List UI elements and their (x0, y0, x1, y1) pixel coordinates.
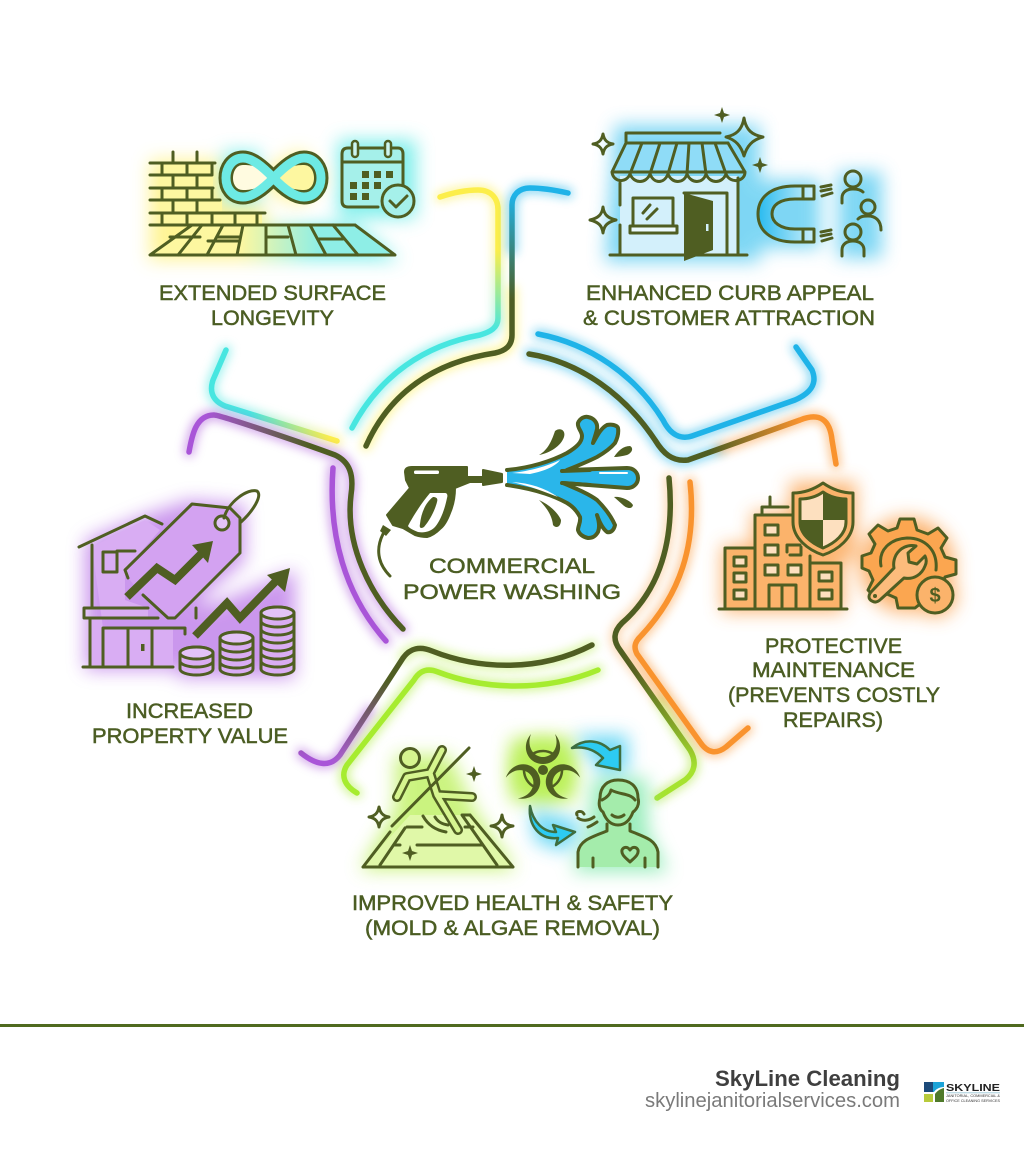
arrow bottom (530, 806, 575, 845)
sparkles (726, 118, 763, 156)
heading: protective maintenance: REPAIRS) (783, 709, 883, 732)
person (400, 748, 420, 768)
heading: protective maintenance: MAINTENANCE (752, 659, 915, 682)
heading: increased property value (92, 700, 288, 748)
connector: purple inner arc (332, 468, 386, 641)
slash (392, 748, 469, 826)
icon: building, shield, gear, dollar (719, 482, 957, 617)
icon: biohazard, arrows, healthy person (503, 734, 668, 872)
footer divider (0, 1024, 1024, 1027)
connector ring (189, 188, 836, 798)
sparkles (402, 766, 482, 861)
arrow top (572, 741, 620, 770)
connector: dark to purple (301, 645, 592, 763)
panel: protective maintenance (719, 482, 957, 732)
icon: storefront, sparkles, magnet, people (590, 107, 882, 262)
heading: enhanced curb appeal (583, 282, 875, 330)
panel: enhanced curb appeal (583, 107, 882, 330)
paving (150, 225, 395, 255)
wall (150, 152, 355, 225)
heading: protective maintenance: PROTECTIVE (765, 635, 902, 658)
heading: extended surface longevity: EXTENDED SURFACE (159, 282, 386, 305)
icon: pressure washer gun (379, 467, 502, 576)
connector: dark to orange (529, 354, 836, 464)
heading: improved health and safety (352, 892, 673, 940)
shop walls (610, 178, 747, 255)
coins (180, 607, 294, 675)
person (578, 815, 658, 867)
connector: cyan to yellow (212, 350, 337, 441)
building (719, 497, 847, 609)
heading: enhanced curb appeal: & CUSTOMER ATTRACTION (583, 307, 875, 330)
connector: dark to green (615, 478, 694, 798)
arrow on tag (127, 552, 203, 597)
shield (793, 483, 853, 555)
panel: increased property value (79, 491, 295, 748)
awning (612, 133, 745, 182)
logo: skyline: OFFICE CLEANING SERVICES (946, 1099, 1001, 1103)
icon: water spray (507, 417, 638, 538)
connector: green (344, 670, 598, 793)
logo: skyline: SKYLINE (946, 1082, 1000, 1094)
logo: skyline (924, 1082, 1001, 1103)
hose (380, 525, 391, 536)
biohazard (503, 734, 583, 803)
connector: orange (635, 482, 748, 752)
heading: protective maintenance (728, 635, 940, 732)
footer: brand (645, 1066, 1001, 1112)
price tag (125, 504, 240, 618)
magnet (758, 186, 814, 242)
gear (862, 519, 956, 608)
wrench (869, 545, 926, 602)
icon: slip hazard (360, 738, 575, 870)
heading: extended surface longevity: LONGEVITY (211, 307, 334, 330)
panel: improved health and safety (352, 734, 673, 940)
door (684, 193, 713, 261)
heading: protective maintenance: (PREVENTS COSTLY (728, 684, 940, 707)
house (79, 516, 185, 667)
rising arrow (195, 580, 277, 636)
people (845, 171, 861, 187)
connector: blue arc (538, 334, 814, 437)
heading: increased property value: PROPERTY VALUE (92, 725, 288, 748)
heading: increased property value: INCREASED (126, 700, 253, 723)
panel: extended surface longevity (145, 140, 416, 330)
heading: improved health and safety: (MOLD & ALGAE REMOVAL) (365, 917, 660, 940)
footer website: skylinejanitorialservices.com (645, 1090, 900, 1112)
floor (363, 815, 513, 867)
window (633, 198, 673, 226)
icon: building, shield, gear, dollar: $ (929, 585, 941, 607)
footer brand name: SkyLine Cleaning (715, 1066, 900, 1091)
connector: blue to dark (366, 188, 568, 446)
heading: improved health and safety: IMPROVED HEALTH & SAFETY (352, 892, 673, 915)
icon: brick wall, infinity, calendar, paving (145, 140, 416, 260)
title: commercial power washing: POWER WASHING (403, 581, 621, 604)
heading: extended surface longevity (159, 282, 386, 330)
title: commercial power washing (403, 555, 621, 604)
title: commercial power washing: COMMERCIAL (429, 555, 595, 578)
icon: house, price tag, growth arrows, coins (79, 491, 295, 678)
panel: center hub (379, 417, 638, 604)
logo: skyline: JANITORIAL, COMMERCIAL & (946, 1094, 1001, 1098)
dollar coin (917, 577, 953, 613)
connector: yellow to cyan (352, 190, 498, 428)
connector: purple to dark (189, 415, 403, 629)
infinity (226, 158, 321, 197)
heading: enhanced curb appeal: ENHANCED CURB APPEAL (586, 282, 874, 305)
calendar (342, 148, 403, 207)
